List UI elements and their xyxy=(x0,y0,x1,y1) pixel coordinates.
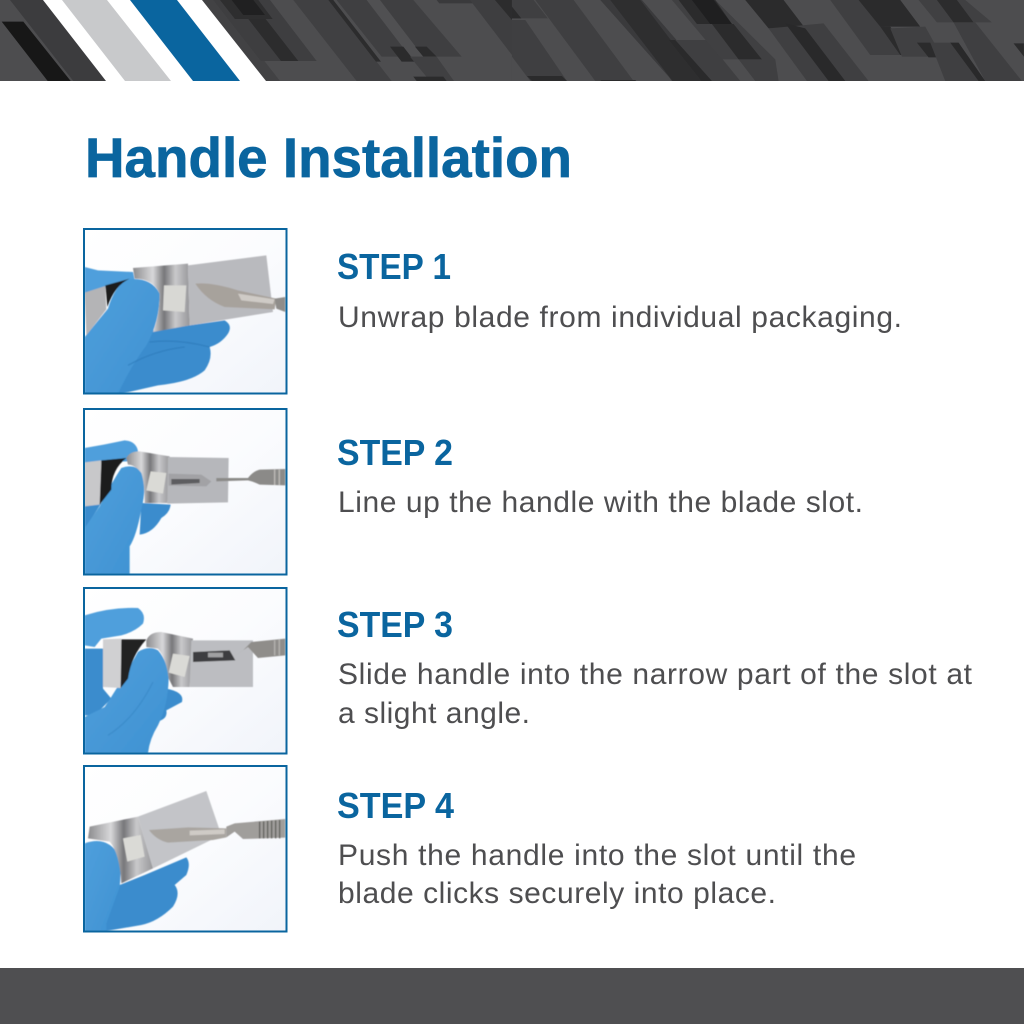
step 4 description: Push the handle into the slot until the xyxy=(338,839,856,872)
step 3 heading: STEP 3 xyxy=(337,604,453,645)
step 3 frame xyxy=(84,588,286,754)
step 4 description: blade clicks securely into place. xyxy=(338,877,776,910)
title: Handle Installation xyxy=(85,126,572,189)
step 4 photo xyxy=(85,790,286,930)
step 1 heading: STEP 1 xyxy=(337,246,451,287)
step 1 frame xyxy=(84,229,286,394)
header banner xyxy=(0,0,1024,81)
step 3 description: a slight angle. xyxy=(338,697,530,730)
step 2 photo xyxy=(85,440,286,574)
step 4 frame xyxy=(84,766,286,932)
footer bar xyxy=(0,968,1024,1024)
step 2 description: Line up the handle with the blade slot. xyxy=(338,486,863,519)
step 3 photo xyxy=(85,607,286,752)
step 4 heading: STEP 4 xyxy=(337,785,454,826)
step 3 description: Slide handle into the narrow part of the slot at xyxy=(338,658,973,691)
step 2 frame xyxy=(84,409,286,574)
step 1 photo xyxy=(85,254,286,392)
step 2 heading: STEP 2 xyxy=(337,432,453,473)
step 1 description: Unwrap blade from individual packaging. xyxy=(338,301,902,334)
